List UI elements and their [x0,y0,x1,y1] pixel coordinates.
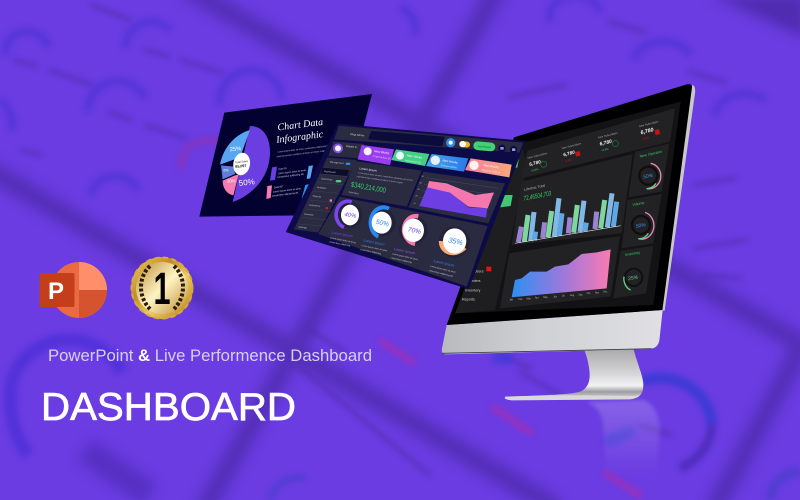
stat card blue: New Works [442,158,458,165]
screen background [455,102,681,313]
panel frame [287,124,525,288]
slide: chart data infographic [199,94,372,217]
heading: Volume [632,201,645,207]
area chart axis labels: Apr [535,297,539,300]
bar chart title: Lifetime Total [524,184,546,192]
stat 2 [561,141,585,163]
stat card green: Assessment 50 [405,159,422,165]
sidebar labels: Reports [462,298,475,302]
profile card [328,141,364,158]
stat 3: +5.8% [601,147,610,152]
stat card purple: Progress Bars 50 [373,155,391,161]
gauge descriptions: Lorem ipsum dolor sit amet, [430,265,457,274]
pink area [427,181,494,208]
area chart panel [500,236,620,308]
icon: PowerPoint logo: P [48,278,64,305]
gauge descriptions: Lorem ipsum dolor sit amet, [392,252,419,261]
stat card blue: Software 85000 [441,164,458,170]
side navigation: Inventory [304,213,315,217]
chart scale: 10 [413,203,417,205]
slide background [199,94,372,217]
stat card purple: New Works [374,149,390,155]
legend items: Lorem ipsum dolor sit amet, [273,187,302,194]
pie chart: 50% [238,177,255,188]
area chart [512,249,611,297]
active nav row [321,168,349,176]
stat 2: 6,780 [563,150,576,157]
bar chart value: 72,46504,703 [523,190,552,203]
slide title: Chart Data [277,117,324,133]
stat 1 [527,151,551,173]
stat 4: 6,780 [640,127,654,136]
monitor [442,84,695,477]
chart scale: 40 [419,182,423,184]
icon: PowerPoint logo [40,262,107,318]
slide description [276,143,338,158]
stat 3: 6,780 [599,139,613,148]
sidebar labels [462,270,484,302]
gauges panel [318,197,488,287]
gauge 70 percent [399,216,428,245]
area chart axis labels: Sep [578,294,583,296]
monitor stand reflection [587,400,660,477]
inventory panel [613,246,653,298]
area chart axis labels: Jan [509,300,514,302]
side navigation: Management [330,161,344,165]
area chart axis labels: Jul [562,296,565,298]
gauge captions: Lorem Ipsum [331,231,353,238]
side navigation [294,157,357,233]
legend items [266,165,313,199]
stat 2: New Subscribers [561,141,582,150]
top bar [334,126,523,153]
area chart axis labels: Dec [603,291,608,293]
area chart axis labels [509,291,608,302]
revenue description: Lorem ipsum dolor sit amet, consectetur adipiscing elit, sed do [358,171,413,182]
slide title: Infographic [275,129,324,146]
slide title [275,117,324,146]
area chart axis labels: Feb [518,299,523,301]
stat card green [391,149,429,166]
stat card orange [465,158,512,177]
top bar: Add Report [478,144,492,149]
legend items: consectetur adipiscing elit [272,191,299,198]
dashboard panel [287,124,525,288]
value: 25% [627,274,639,282]
top bar label: Shop Admin [350,132,365,138]
icon: gold number one badge: 1 [154,263,170,314]
heading: Inventory [625,251,641,257]
stat 1: +5.8% [530,167,539,173]
stat 3 [597,131,622,152]
volume panel [622,194,662,248]
sidebar labels: Inventory [465,288,481,292]
gauge 40 percent: 40% [344,212,357,220]
monitor bezel [447,84,692,325]
stat card blue [426,154,468,172]
chart scale: 30 [417,189,421,191]
side navigation: Customers [309,204,321,208]
area chart axis labels: Nov [595,292,600,294]
heading: New Operator [639,149,663,159]
stat 4: -2.5% [642,135,650,141]
stat 2: -2.5% [564,157,573,163]
stat 4: New Subscribers [638,119,660,128]
sidebar labels: Orders [469,279,481,283]
gauge [639,167,657,185]
stat card purple [358,145,394,165]
nav markers [346,163,350,165]
area chart axis labels: May [543,297,549,299]
gauge descriptions: consectetur adipiscing [329,240,351,248]
pie chart [220,126,270,202]
gauge [625,269,642,286]
gauge descriptions: consectetur adipiscing elit [428,269,453,278]
pie labels: 25% [230,146,242,153]
stat 4 [638,119,663,141]
chart scale: 50 [421,176,425,178]
revenue caption: Total Sales [348,191,359,195]
gauge [632,216,650,234]
chart scale: 20 [415,196,419,198]
add button [473,141,496,152]
gauge captions: Lorem Ipsum [363,238,385,247]
settings button [446,138,455,147]
gauge 35 percent [439,226,470,258]
stat 1: 6,780 [529,159,542,167]
stat card orange: New Works [483,163,499,169]
slide description: eiusmod tempor incididunt ut labore et dolore magna aliqua [276,148,334,158]
area chart axis labels: Aug [570,294,575,297]
gauge descriptions: consectetur adipiscing [360,248,382,256]
gauge descriptions: consectetur adipiscing [390,256,413,264]
legend items: Data 02 [278,167,288,171]
profile card: Robert Jr. [346,144,358,149]
stat 1: New Subscribers [527,151,548,160]
side navigation: Dashboard [324,170,336,174]
gauge descriptions [329,236,457,278]
revenue chart panel [408,172,505,223]
stats panel [522,108,675,178]
icon: gold number one badge [131,257,193,319]
gauge 50 percent: 50% [375,219,390,228]
chart scale [413,176,425,205]
slide description: Lorem ipsum dolor sit amet, consectetur adipiscing elit, sed do [277,143,338,154]
gauge 35 percent: 35% [447,235,464,247]
sidebar labels: Users [474,270,484,274]
gauge captions: Lorem Ipsum [433,259,455,268]
side navigation: Sales Data [321,177,333,182]
gauge captions: Lorem Ipsum [394,247,415,255]
revenue description: eiusmod tempor incididunt ut labore et dolore magna [357,175,404,185]
gauge captions [331,231,455,268]
pie chart: Total Sales [235,159,249,164]
search field [369,132,444,146]
revenue value: $340,214,000 [350,180,387,195]
stat card orange: Progress Field 50 [482,169,501,175]
legend items: consectetur adipiscing elit [277,173,304,179]
pie chart: 85,097 [235,164,247,169]
area chart axis labels: Oct [587,292,591,295]
sidebar red marker [486,267,491,271]
value: 50% [643,173,654,181]
side navigation: Reports [313,195,322,199]
sidebar green marker [516,159,519,168]
area chart axis labels: Mar [527,297,531,300]
purple area [419,187,487,218]
revenue heading: Lorem Ipsum [359,166,378,173]
bar chart panel [512,154,633,245]
legend items: Data 957 [274,185,284,189]
side navigation: Analytics [317,186,327,190]
gauge 70 percent: 70% [407,226,422,236]
side navigation: Settings [298,226,308,230]
monitor chin [442,310,663,354]
revenue panel [342,161,422,207]
pie chart: 20% [227,178,236,183]
gauge 40 percent [336,201,363,228]
icon buttons [498,145,506,152]
sidebar green tab [500,195,513,207]
new operator panel [628,143,669,197]
area chart axis labels: Jun [553,296,558,298]
bars [518,193,617,242]
bar chart axis [515,226,621,243]
sidebar [455,143,527,313]
gauge descriptions: Lorem ipsum dolor sit amet, [361,244,388,253]
gauge 50 percent [368,207,396,237]
gauge descriptions: Lorem ipsum dolor sit amet, [330,236,357,244]
pie chart: 5% [223,169,229,173]
title: DASHBOARD [41,386,296,429]
toggle [459,141,470,148]
stat 3: New Subscribers [597,131,619,140]
revenue description [357,171,413,185]
monitor stand [505,349,643,400]
subtitle: PowerPoint & Live Performence Dashboard [48,347,372,365]
legend items: Lorem ipsum dolor sit amet, [278,169,307,175]
value: 50% [635,222,647,230]
stat card green: New Works [407,153,423,160]
